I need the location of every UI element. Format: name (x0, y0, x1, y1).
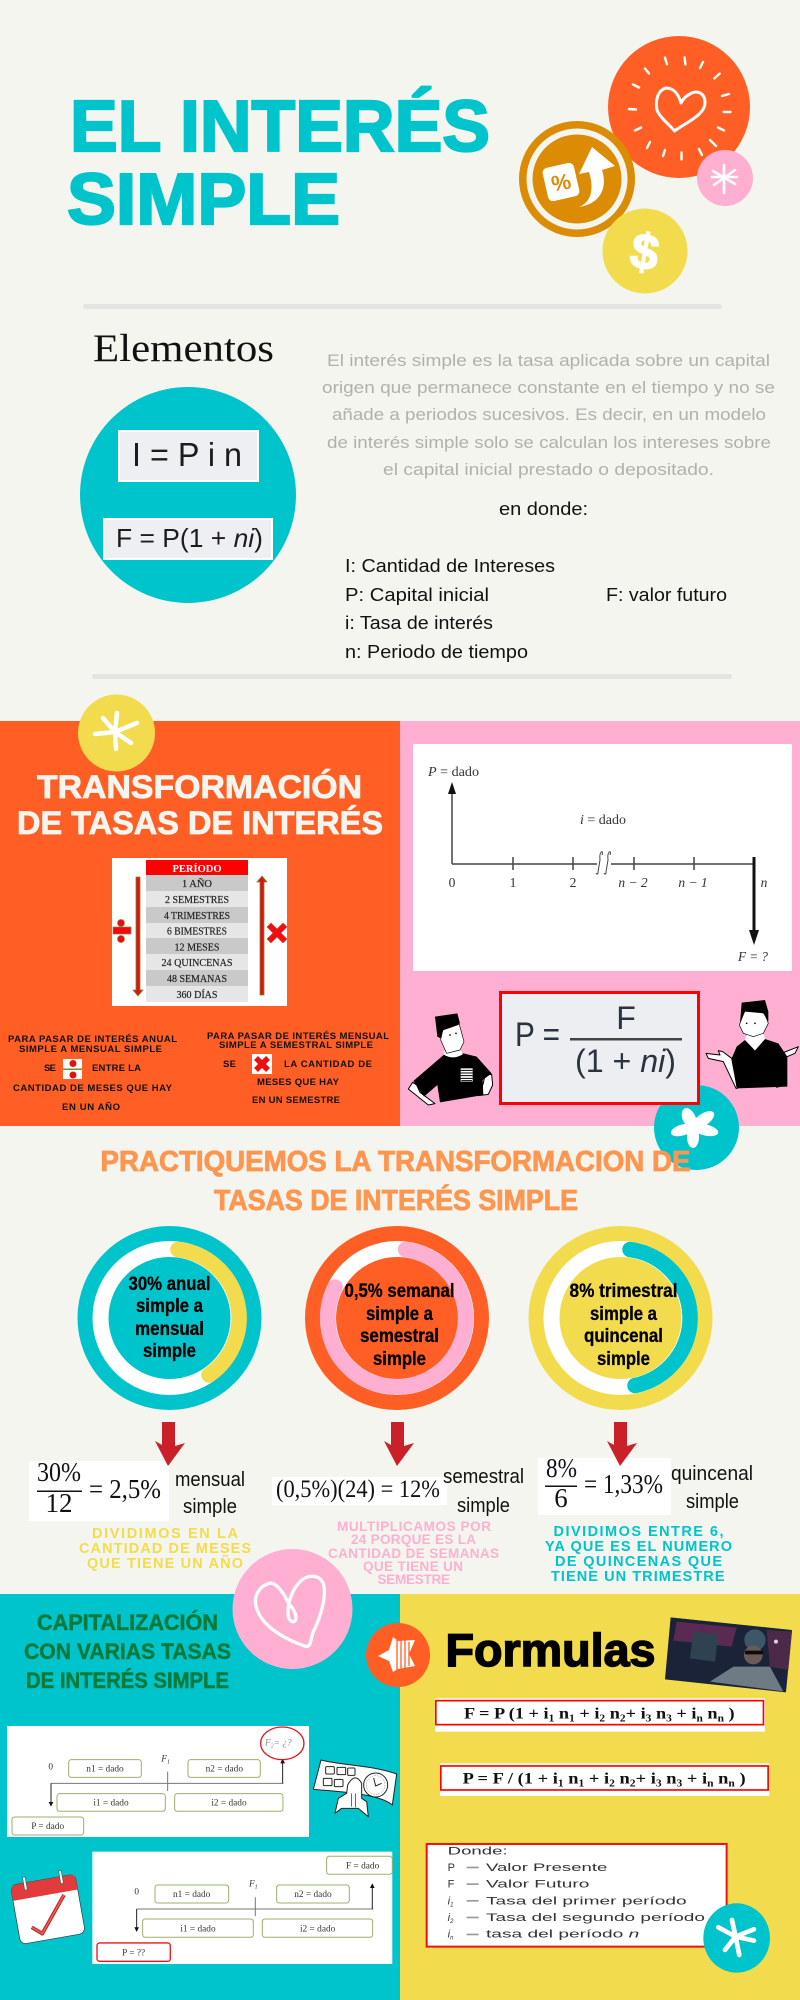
formula: F (435, 1698, 765, 1732)
icon: divide small (63, 1059, 82, 1079)
table: período: 24 QUINCENAS (162, 958, 233, 969)
arrow: red 3 (607, 1422, 637, 1466)
chart: timeline: n (761, 875, 768, 890)
text: definition paragraph: El interés simple es la tasa aplicada sobre un capital (327, 351, 770, 370)
icon: pink heart circle (232, 1549, 352, 1669)
legend: donde (427, 1844, 727, 1947)
formula: F: n (605, 1705, 620, 1722)
icon: orange star circle (366, 1623, 430, 1687)
text: caption pink: MULTIPLICAMOS POR (337, 1519, 491, 1534)
heading: elementos: Elementos (93, 327, 274, 370)
chart: diagrama F2: i2 = dado (211, 1799, 247, 1809)
text: caption left (8, 1034, 177, 1113)
list: variables: n: Periodo de tiempo (345, 642, 528, 662)
formula: P: n (707, 1779, 714, 1790)
formula: P = F / (1 + ni): P = (515, 1016, 560, 1054)
table: período: 48 SEMANAS (167, 974, 227, 985)
text: caption yellow: CANTIDAD DE MESES (79, 1541, 251, 1557)
formula: F: 3 (666, 1714, 672, 1725)
list: variables: P: Capital inicial (345, 585, 489, 605)
icon: calendar clock hand (313, 1760, 397, 1817)
text: caption left: CANTIDAD DE MESES QUE HAY (13, 1083, 173, 1094)
formula: I = P i n (119, 431, 258, 481)
chart: diagrama F2: F (265, 1739, 271, 1749)
formula: P: 3 (656, 1779, 662, 1790)
formula: P = F / (1 + ni): (1 + ni) (575, 1043, 676, 1079)
formula: P: 2 (630, 1779, 636, 1790)
text: caption right: LA CANTIDAD DE (284, 1059, 372, 1070)
formula: P = F / (1 + ni): F (616, 1000, 636, 1036)
result: 1,33% quincenal: 6 (554, 1483, 568, 1513)
chart: timeline: 2 (570, 875, 576, 890)
result: 2,5% mensual: 12 (46, 1488, 72, 1518)
formula: P: ) (735, 1770, 746, 1787)
text: caption pink: CANTIDAD DE SEMANAS (328, 1546, 499, 1561)
legend: donde: tasa del período n (486, 1929, 639, 1941)
text: definition paragraph: el capital inicial prestado o depositado. (383, 460, 714, 479)
formula: F: 2 (620, 1714, 626, 1725)
icon: orange heart circle (608, 36, 750, 178)
text: caption left: SIMPLE A MENSUAL SIMPLE (19, 1044, 162, 1055)
text: caption teal (545, 1524, 732, 1585)
title: SIMPLE (67, 160, 340, 240)
chart: diagrama P: F (249, 1880, 255, 1890)
chart: timeline: 1 (510, 875, 516, 890)
panel: formula circle (80, 387, 296, 603)
formula: P: n (728, 1779, 735, 1790)
list: variables: i: Tasa de interés (345, 613, 493, 633)
text: caption teal: DIVIDIMOS ENTRE 6, (554, 1524, 724, 1540)
ring: 30% anual: simple (143, 1341, 196, 1362)
panel: transformación (0, 694, 400, 1126)
text: caption pink: QUE TIENE UN (363, 1559, 463, 1574)
formula: F: F = P (1 + i (464, 1705, 538, 1722)
chart: diagrama F2: i1 = dado (93, 1799, 129, 1809)
icon: divide (113, 920, 131, 942)
chart: timeline: n − 2 (618, 875, 648, 890)
chart: diagrama P: n2 = dado (294, 1890, 332, 1900)
arrow: red 2 (384, 1422, 414, 1466)
ring: 0,5% semanal: semestral (360, 1326, 439, 1347)
formula: F: n (651, 1705, 666, 1722)
chart: diagrama P: 1 (255, 1884, 258, 1890)
illustration: man left (408, 1013, 493, 1105)
divider (83, 304, 722, 309)
formula: P: 1 (558, 1779, 564, 1790)
text: caption pink: SEMESTRE (378, 1572, 450, 1587)
text: caption yellow: DIVIDIMOS EN LA (92, 1526, 239, 1542)
text: caption right: EN UN SEMESTRE (252, 1095, 340, 1106)
icon: pink asterisk circle (697, 150, 753, 206)
chart: diagrama F2: n2 = dado (206, 1765, 243, 1775)
text: caption right: MESES QUE HAY (257, 1077, 340, 1088)
heading: formulas: Formulas (446, 1624, 656, 1676)
text: definition paragraph: añade a periodos sucesivos. Es decir, en un modelo (332, 405, 766, 424)
chart: diagrama P: P = ?? (122, 1948, 145, 1958)
legend: donde: i (448, 1895, 450, 1907)
formula: F: + i (575, 1705, 600, 1722)
result: 12% semestral: semestral (443, 1466, 524, 1488)
table: período: 4 TRIMESTRES (164, 911, 230, 922)
text: en donde: en donde: (499, 499, 588, 519)
legend: donde: i (448, 1929, 450, 1941)
text: caption left: ENTRE LA (92, 1063, 141, 1074)
icon: teal asterisk circle (703, 1903, 770, 1973)
ring: 0,5% semanal: 0,5% semanal (344, 1281, 454, 1302)
arrow: red 1 (155, 1422, 185, 1466)
formula: P: n (615, 1770, 630, 1787)
formula: P = F / (1 + ni) (500, 992, 698, 1104)
legend: donde: Tasa del segundo período (486, 1912, 705, 1924)
formula: P: n (662, 1770, 677, 1787)
formula: P: + i (584, 1770, 610, 1787)
title (67, 87, 490, 240)
chart: diagrama F2: P = dado (31, 1822, 64, 1832)
formula: P (440, 1763, 769, 1796)
chart: diagrama F2: 0 (48, 1762, 53, 1772)
formula: I = P i n: I = P i n (132, 436, 242, 473)
result: 1,33% quincenal: simple (686, 1491, 739, 1513)
text: caption right (207, 1031, 389, 1106)
legend: donde: Donde: (448, 1845, 508, 1857)
text: caption left: EN UN AÑO (62, 1102, 120, 1113)
chart: diagrama P: F = dado (346, 1861, 380, 1871)
legend: donde: F (448, 1879, 455, 1891)
icon: yellow dollar circle: $ (626, 222, 664, 282)
icon: teal flower circle (654, 1085, 739, 1170)
heading: PRACTIQUEMOS LA TRANSFORMACION DE (100, 1146, 690, 1178)
text: caption right: SIMPLE A SEMESTRAL SIMPLE (219, 1040, 373, 1051)
chart: diagrama F2: n1 = dado (86, 1765, 124, 1775)
ring: 8% trimestral: simple a (590, 1304, 657, 1325)
text: caption teal: DE QUINCENAS QUE (555, 1554, 722, 1570)
result: 2,5% mensual: 30% (37, 1457, 81, 1487)
table: período (112, 858, 287, 1006)
result: 2,5% mensual: simple (183, 1496, 237, 1518)
formula: P: + i (636, 1770, 656, 1787)
result: 2,5% mensual: mensual (175, 1469, 245, 1491)
formula: F: n (718, 1714, 724, 1725)
legend: donde: n (450, 1936, 454, 1942)
formula: F: + i (672, 1705, 697, 1722)
legend: donde: 2 (449, 1919, 454, 1925)
formula: P: 1 (579, 1779, 584, 1790)
ring: 0,5% semanal: simple (373, 1349, 426, 1370)
list: variables: I: Cantidad de Intereses (345, 556, 555, 576)
text: caption right: SE (223, 1059, 236, 1070)
formula: F: 1 (549, 1714, 554, 1725)
formula: F: n (554, 1705, 569, 1722)
formula: P: 3 (676, 1779, 682, 1790)
arrow: divide down (133, 877, 143, 996)
result: 12% semestral (272, 1466, 524, 1517)
formula: F: 3 (646, 1714, 651, 1725)
photo: scientist (665, 1617, 792, 1692)
legend: donde: i (448, 1912, 450, 1924)
formula: F: + i (626, 1705, 646, 1722)
formula: P: + i (682, 1770, 708, 1787)
ring: 0,5% semanal: simple a (366, 1304, 433, 1325)
formula: F: n (697, 1714, 703, 1725)
chart: diagrama F2: F (161, 1755, 167, 1765)
list: variables (345, 556, 727, 662)
text: caption pink (328, 1519, 499, 1587)
section: practiquemos (29, 1146, 753, 1587)
ring: 0,5% semanal (312, 1234, 482, 1402)
legend: donde: Valor Presente (486, 1862, 607, 1874)
heading: CAPITALIZACIÓN (37, 1610, 218, 1635)
heading: TASAS DE INTERÉS SIMPLE (214, 1185, 578, 1217)
legend: donde: Tasa del primer período (486, 1895, 687, 1907)
chart: diagrama F2: = ¿? (274, 1739, 292, 1749)
formula: F: 1 (569, 1714, 575, 1725)
table: período: 1 AÑO (182, 878, 212, 890)
result: 1,33% quincenal: = 1,33% (584, 1469, 663, 1499)
formula: F: ) (724, 1705, 735, 1722)
ring: 30% anual: mensual (135, 1319, 204, 1340)
result: 1,33% quincenal: quincenal (671, 1463, 753, 1485)
chart: diagrama P: 0 (134, 1887, 139, 1897)
chart: diagrama P: n1 = dado (173, 1890, 211, 1900)
panel: capitalización (0, 1594, 400, 2000)
icon: calendar check (9, 1868, 85, 1945)
formula: F: n (703, 1705, 718, 1722)
formula: F: 2 (599, 1714, 605, 1725)
text: definition paragraph: de interés simple solo se calculan los intereses sobre (327, 433, 771, 452)
table: período: 360 DÍAS (176, 989, 218, 1001)
formula: F = P(1 + ni) (104, 519, 272, 559)
text: definition paragraph: origen que permanece constante en el tiempo y no se (322, 378, 775, 397)
text: caption pink: 24 PORQUE ES LA (351, 1532, 476, 1547)
text: caption teal: TIENE UN TRIMESTRE (551, 1569, 725, 1585)
chart: diagrama P: i1 = dado (180, 1925, 216, 1935)
legend: donde: P (448, 1862, 455, 1874)
ring: 30% anual (85, 1234, 254, 1402)
result: 1,33% quincenal: 8% (546, 1453, 577, 1483)
arrow: multiply up (257, 876, 267, 995)
text: caption teal: YA QUE ES EL NUMERO (545, 1539, 732, 1555)
table: período: 12 MESES (174, 942, 220, 954)
icon: yellow dollar circle (602, 208, 688, 294)
icon: multiply small (252, 1054, 272, 1074)
chart: timeline: F = ? (737, 949, 768, 964)
table: período: 6 BIMESTRES (167, 926, 227, 938)
icon: multiply (271, 927, 283, 939)
heading: DE TASAS DE INTERÉS (17, 805, 383, 841)
legend: donde: Valor Futuro (486, 1879, 589, 1891)
result: 2,5% mensual: = 2,5% (89, 1474, 161, 1504)
formula: P: n (564, 1770, 579, 1787)
heading (17, 769, 383, 841)
chart: timeline: n − 1 (678, 875, 708, 890)
chart: diagrama F2: 1 (167, 1759, 170, 1765)
chart: timeline (413, 744, 792, 971)
chart: diagrama F2 (7, 1726, 309, 1837)
heading: DE INTERÉS SIMPLE (26, 1668, 229, 1693)
table: período: PERÍODO (172, 863, 222, 875)
heading: CON VARIAS TASAS (24, 1639, 231, 1664)
chart: diagrama P (92, 1852, 392, 1964)
formula: F = P(1 + ni): F = P(1 + ni) (116, 523, 263, 553)
panel: diagrama de flujo (400, 721, 800, 1126)
heading (24, 1610, 231, 1693)
icon: gold percent arrow coin (519, 121, 635, 237)
divider (92, 674, 732, 679)
table: período: 2 SEMESTRES (165, 895, 229, 906)
ring: 8% trimestral (536, 1234, 705, 1402)
ring: 8% trimestral: simple (597, 1349, 650, 1370)
icon: yellow asterisk circle (78, 694, 155, 772)
text: caption yellow (79, 1526, 251, 1572)
panel: formulas (400, 1594, 800, 2000)
illustration: man right (706, 1000, 798, 1088)
icon: gold percent arrow coin: % (549, 168, 573, 197)
list: variables: F: valor futuro (606, 585, 727, 605)
ring: 8% trimestral: quincenal (584, 1326, 663, 1347)
chart: diagrama P: i2 = dado (300, 1925, 336, 1935)
result: 1,33% quincenal (538, 1453, 753, 1515)
text: caption right: PARA PASAR DE INTERÉS MENSUAL (207, 1031, 389, 1042)
heading: TRANSFORMACIÓN (37, 769, 362, 805)
text: caption yellow: QUE TIENE UN AÑO (87, 1554, 243, 1572)
result: 12% semestral: (0,5%)(24) = 12% (276, 1476, 440, 1503)
ring: 30% anual: simple a (136, 1296, 203, 1317)
ring: 30% anual: 30% anual (128, 1274, 210, 1295)
chart: timeline: 0 (449, 875, 456, 890)
text: definition paragraph (322, 351, 775, 479)
result: 12% semestral: simple (457, 1495, 510, 1517)
text: caption left: SE (44, 1063, 56, 1074)
chart: timeline: i = dado (580, 812, 626, 827)
result: 2,5% mensual (29, 1457, 245, 1521)
title: EL INTERÉS (70, 87, 490, 167)
heading (100, 1146, 690, 1217)
legend: donde: 1 (450, 1902, 453, 1908)
formula: P: n (714, 1770, 729, 1787)
formula: P: 2 (609, 1779, 615, 1790)
chart: timeline: P = dado (427, 764, 479, 779)
text: caption left: PARA PASAR DE INTERÉS ANUAL (8, 1034, 177, 1045)
formula: P: P = F / (1 + i (463, 1770, 545, 1787)
ring: 8% trimestral: 8% trimestral (570, 1281, 678, 1302)
chart: diagrama F2: 2 (271, 1743, 274, 1749)
